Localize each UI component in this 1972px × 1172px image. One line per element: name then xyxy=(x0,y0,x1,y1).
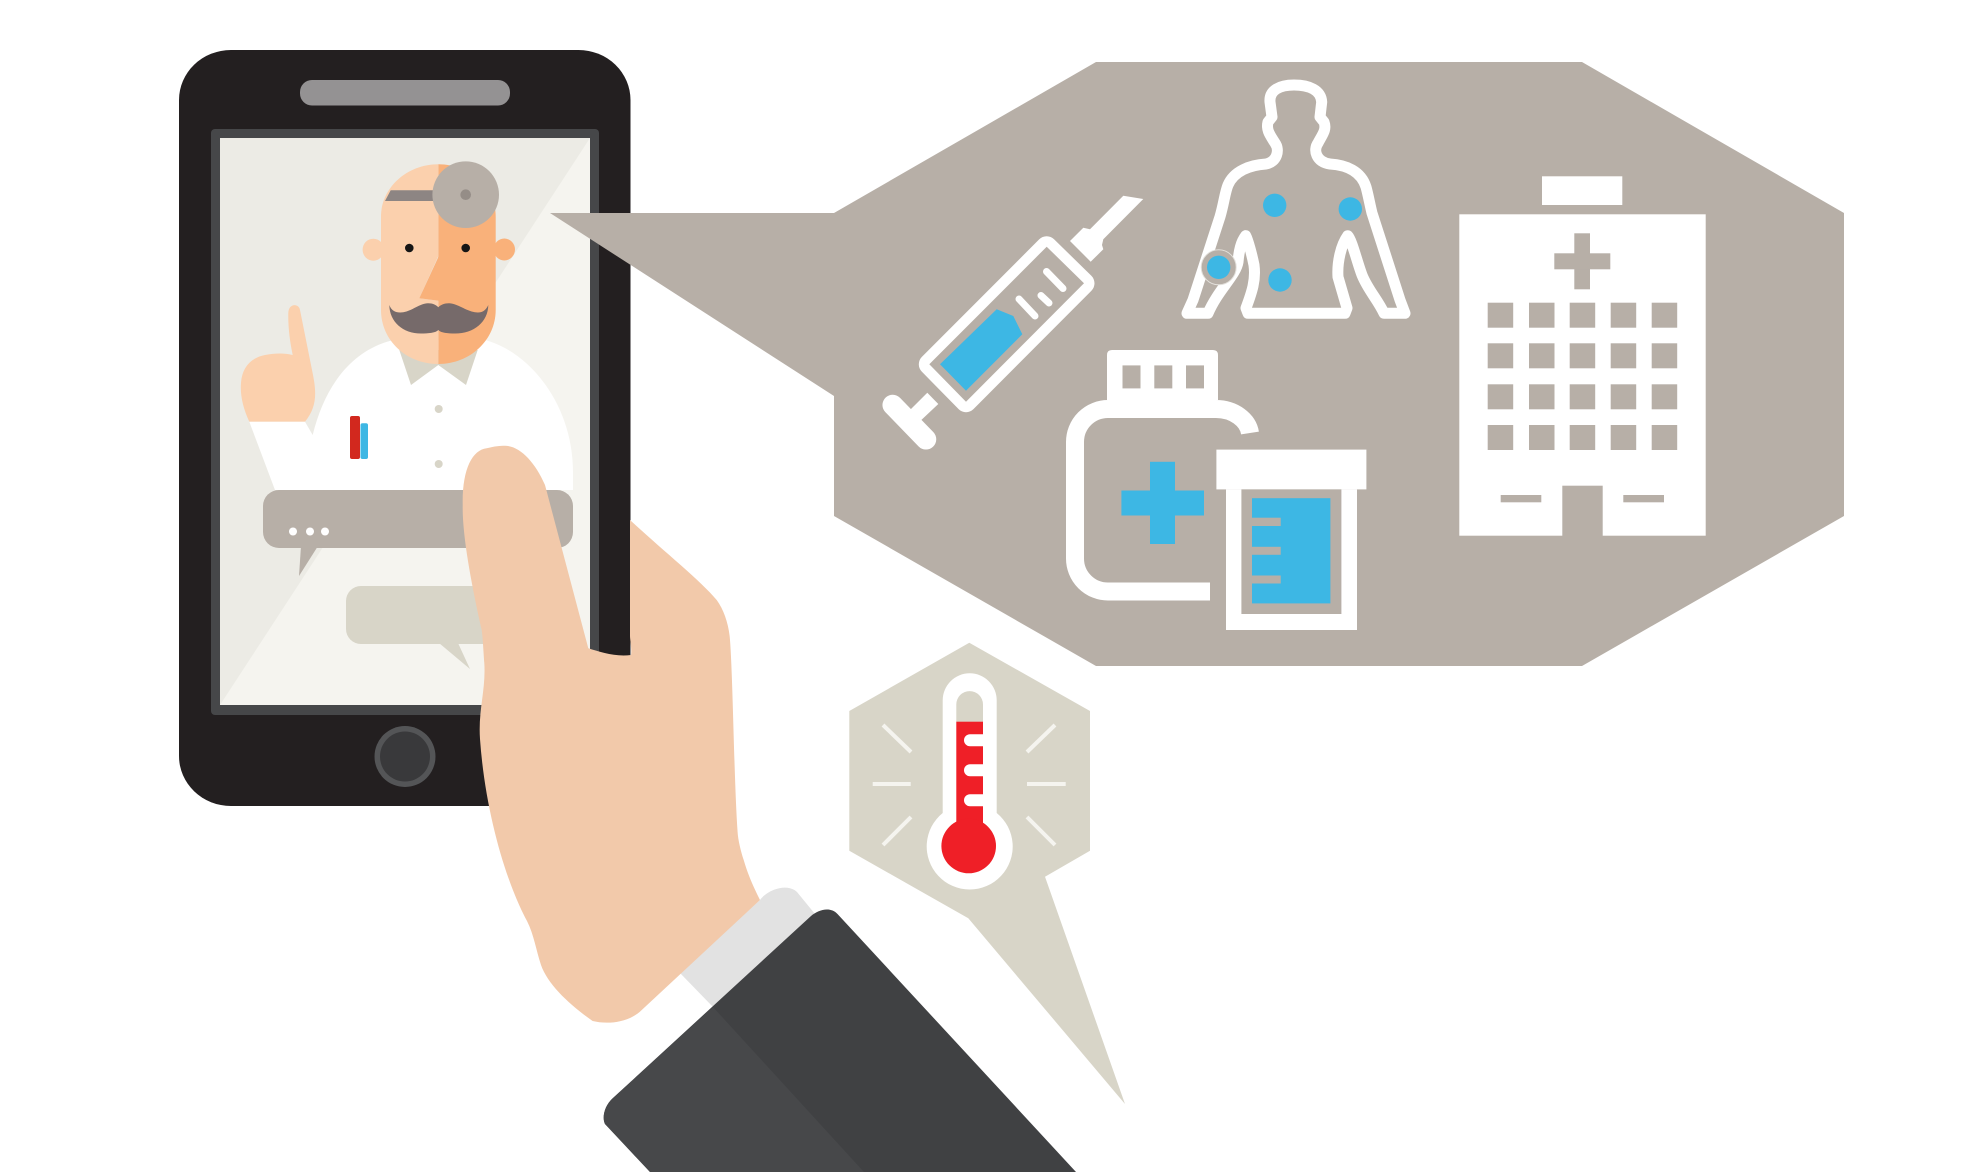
marker spots xyxy=(1201,194,1362,292)
doctor coat xyxy=(249,340,573,490)
body outline xyxy=(1187,85,1405,313)
syringe liquid xyxy=(940,309,1022,391)
shirt cuff xyxy=(680,888,815,1007)
icon: medicine bottle xyxy=(1075,350,1250,592)
icon: hospital xyxy=(1459,176,1706,538)
bubble shape xyxy=(849,643,1125,1104)
syringe scale marks xyxy=(1019,272,1063,316)
syringe needle xyxy=(1070,196,1143,262)
hand xyxy=(463,446,760,1023)
phone body xyxy=(179,50,630,806)
icon: syringe xyxy=(893,196,1143,439)
hospital building xyxy=(1459,214,1706,536)
coat buttons xyxy=(435,405,443,468)
phone speaker xyxy=(300,80,510,106)
face xyxy=(381,164,496,364)
syringe barrel xyxy=(929,247,1084,402)
thermometer channel xyxy=(956,691,983,722)
smartphone xyxy=(179,50,630,806)
jar inner xyxy=(1241,489,1341,614)
eyes xyxy=(405,244,470,252)
panel: thermometer speech bubble xyxy=(849,643,1125,1104)
hospital cross xyxy=(1554,233,1610,289)
hospital windows xyxy=(1488,303,1677,450)
screen background xyxy=(220,138,590,705)
ears xyxy=(363,238,515,261)
screen bezel xyxy=(211,129,599,715)
jar body xyxy=(1226,489,1357,630)
bottle cap xyxy=(1107,350,1218,400)
jacket sleeve xyxy=(604,910,1076,1172)
head mirror xyxy=(432,161,499,228)
head band xyxy=(385,190,436,201)
mercury xyxy=(941,722,996,873)
chat bubble: doctor xyxy=(263,490,573,576)
icon: human body xyxy=(1187,85,1405,313)
bottle outline xyxy=(1075,409,1250,592)
syringe plunger xyxy=(893,393,938,439)
temperature ticks xyxy=(964,734,983,806)
pocket pens xyxy=(350,416,368,459)
jar lid xyxy=(1216,450,1366,489)
chat bubble: patient xyxy=(346,586,506,669)
icon: thermometer xyxy=(927,673,1013,889)
collar xyxy=(399,350,478,385)
jar label xyxy=(1252,498,1330,603)
moustache xyxy=(389,303,488,334)
hospital sign xyxy=(1542,176,1622,205)
icon: pill jar xyxy=(1216,450,1366,630)
home button xyxy=(374,726,436,787)
panel: treatment speech bubble xyxy=(550,62,1844,666)
arm and hand xyxy=(463,446,1076,1172)
heat rays xyxy=(873,725,1066,845)
blue cross xyxy=(1121,462,1204,544)
thermometer case xyxy=(927,673,1013,889)
doctor xyxy=(241,161,573,490)
hospital door and signs xyxy=(1501,486,1664,538)
doctor raised hand xyxy=(241,305,315,422)
bubble shape xyxy=(550,62,1844,666)
